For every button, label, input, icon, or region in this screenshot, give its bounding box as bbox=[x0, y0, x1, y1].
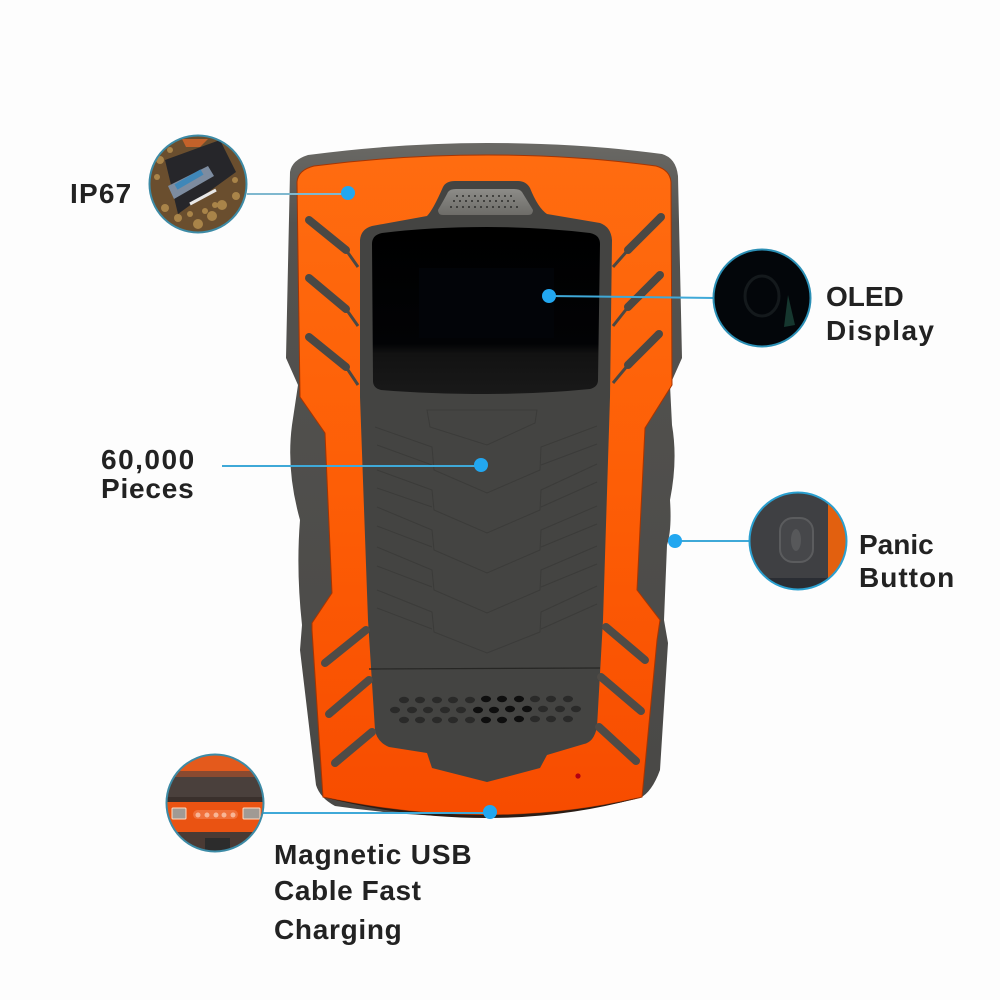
device centre panel bbox=[360, 181, 612, 782]
thumbnail: IP67 bbox=[148, 134, 248, 234]
battery seam bbox=[369, 668, 600, 669]
red LED bbox=[575, 773, 581, 779]
label: 60,000 Pieces: 60,000 bbox=[101, 444, 196, 475]
bottom speaker grille bbox=[390, 696, 581, 723]
lower side grooves bbox=[325, 627, 645, 763]
label: Panic Button: Panic bbox=[859, 529, 934, 560]
label: Magnetic USB Cable Fast Charging: Charging bbox=[274, 914, 402, 945]
back panel chevrons bbox=[375, 410, 597, 653]
thumbnail: magnetic charger bbox=[165, 753, 265, 854]
device outer shell bbox=[286, 143, 682, 817]
upper side grooves bbox=[309, 217, 661, 367]
label: Panic Button: Button bbox=[859, 562, 955, 593]
label: OLED Display: OLED bbox=[826, 281, 904, 312]
bottom edge shadow bbox=[323, 797, 642, 818]
thumbnail: panic button bbox=[750, 492, 850, 590]
callout lines bbox=[222, 194, 751, 813]
OLED screen bbox=[372, 227, 600, 394]
thumbnail: OLED bbox=[714, 250, 810, 346]
dim display area bbox=[419, 268, 554, 338]
marker dots bbox=[341, 186, 682, 819]
device orange body bbox=[297, 155, 672, 815]
label: 60,000 Pieces: Pieces bbox=[101, 473, 195, 504]
label: Magnetic USB Cable Fast Charging: Magnetic USB bbox=[274, 839, 472, 870]
label: Magnetic USB Cable Fast Charging: Cable Fast bbox=[274, 875, 422, 906]
device bbox=[286, 143, 682, 818]
label: OLED Display: Display bbox=[826, 315, 935, 346]
earpiece speaker bbox=[438, 189, 533, 215]
label: IP67: IP67 bbox=[70, 178, 132, 209]
